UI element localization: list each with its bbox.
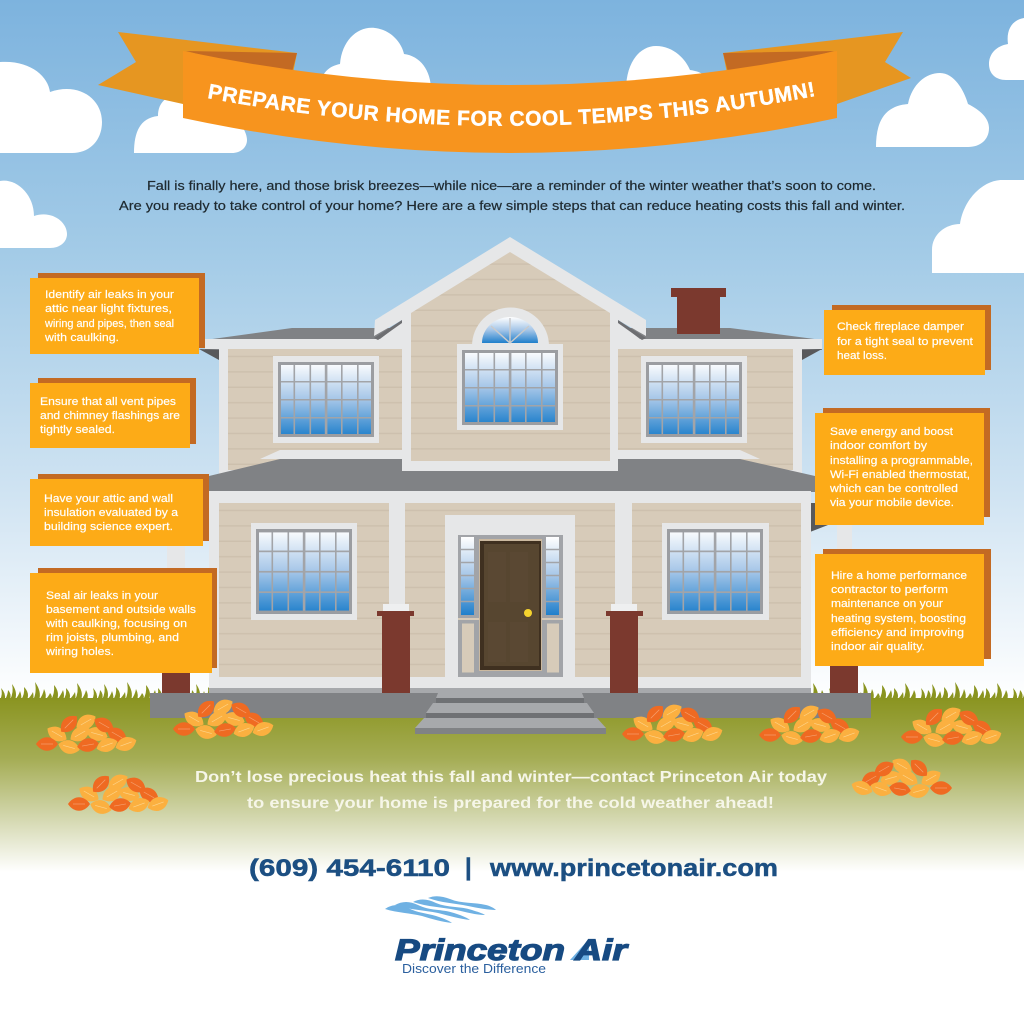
leaf piles [36,696,1004,816]
tip box: air leaks in attic: with caulking. [44,332,119,344]
porch foundation [150,688,871,718]
sky background [0,0,1024,700]
tip box: fireplace damper [824,305,991,375]
left porch column [377,503,414,693]
tip box: basement air leaks: Seal air leaks in your [46,590,158,602]
upper eave band [205,322,822,349]
intro text: Are you ready to take control of your home? Here are a few simple steps that can reduce heating costs this fall and winter. [119,199,905,213]
door assembly [445,515,575,680]
house [162,237,858,693]
lower roof [209,459,815,492]
tip box: vent pipes: tightly sealed. [40,424,115,436]
tip box: home performance contractor: maintenance on your [831,598,943,610]
tip box: basement air leaks: rim joists, plumbing, and [46,632,179,644]
upper left window [273,356,379,443]
contact line: www.princetonair.com [489,855,778,882]
tip box: insulation: insulation evaluated by a [44,507,179,519]
banner folds [186,51,834,72]
contact line: | [465,854,472,881]
logo accent [570,939,589,960]
lawn [0,698,1024,872]
tip box: air leaks in attic: attic near light fixtures, [45,303,172,315]
gable shadows [374,320,646,340]
tip box: thermostat: via your mobile device. [830,497,954,509]
tip box: air leaks in attic: wiring and pipes, then seal [44,318,174,330]
tip box: thermostat: Wi-Fi enabled thermostat, [830,469,970,481]
lower eave shadow [810,503,828,532]
call to action: to ensure your home is prepared for the cold weather ahead! [247,795,774,812]
tip box: basement air leaks: basement and outside walls [46,604,197,616]
tip box: home performance contractor: contractor to perform [831,584,948,596]
outer porch columns [167,520,852,676]
tip box: air leaks in attic [30,273,205,354]
tip box: home performance contractor: Hire a home performance [831,570,967,582]
tip box: thermostat: which can be controlled [829,483,958,495]
sidelights [461,537,559,615]
tip box: vent pipes [30,378,196,448]
tip box: home performance contractor: heating system, boosting [831,613,966,625]
tip box: fireplace damper: heat loss. [837,350,887,362]
lower side panels [458,618,563,672]
upper walls [219,345,802,475]
lower right window [662,523,769,620]
outer porch bases [162,666,858,693]
front steps [415,688,606,734]
contact line [249,854,778,882]
logo: Princeton Air [385,896,630,976]
tip box: insulation: Have your attic and wall [44,493,173,505]
door knob [524,609,532,617]
door [479,539,542,671]
tip box: fireplace damper: Check fireplace damper [837,321,964,333]
logo: Princeton Air: Air [574,934,630,967]
tip box: basement air leaks: wiring holes. [45,646,114,658]
tip box: thermostat [815,408,990,525]
tip box: thermostat: Save energy and boost [830,426,953,438]
tip box: thermostat: indoor comfort by [830,440,928,452]
lower wall [209,491,811,688]
tip box: vent pipes: Ensure that all vent pipes [40,396,177,408]
tip box: basement air leaks: with caulking, focusing on [45,618,187,630]
chimney [671,288,726,334]
tip box: vent pipes: and chimney flashings are [40,410,180,422]
tip box: fireplace damper: for a tight seal to prevent [837,336,973,348]
center arched window [457,308,563,430]
call to action: Don’t lose precious heat this fall and winter—contact Princeton Air today [195,769,827,786]
right porch column [606,503,643,693]
tip box: insulation [30,474,209,546]
lower roof trim [260,450,760,459]
clouds [0,18,1024,273]
contact line: (609) 454-6110 [249,855,450,882]
lower left window [251,523,357,620]
title banner [98,32,911,153]
central gable [374,237,646,471]
tip box: air leaks in attic: Identify air leaks in your [45,289,174,301]
upper right window [641,356,747,443]
banner tail: right [723,32,911,104]
tip box: insulation: building science expert. [44,521,173,533]
logo wordmark: Princeton [395,934,565,967]
tip box: home performance contractor: efficiency and improving [831,627,964,639]
call to action [195,769,827,812]
banner tail: left [98,32,297,104]
upper roof [205,328,822,350]
tip box: home performance contractor: indoor air quality. [831,641,925,653]
logo wave mark [385,896,496,923]
grass [0,680,1024,700]
logo tagline: Discover the Difference [402,962,546,976]
banner title: PREPARE YOUR HOME FOR COOL TEMPS THIS AUTUMN! [208,82,814,126]
intro text: Fall is finally here, and those brisk breezes—while nice—are a reminder of the winter weather that’s soon to come. [147,179,876,193]
intro text [119,179,905,213]
eave shadows [199,349,822,360]
tip box: thermostat: installing a programmable, [830,455,973,467]
tip box: basement air leaks [30,568,217,673]
tip box: home performance contractor [815,549,991,666]
banner ribbon [183,51,837,153]
